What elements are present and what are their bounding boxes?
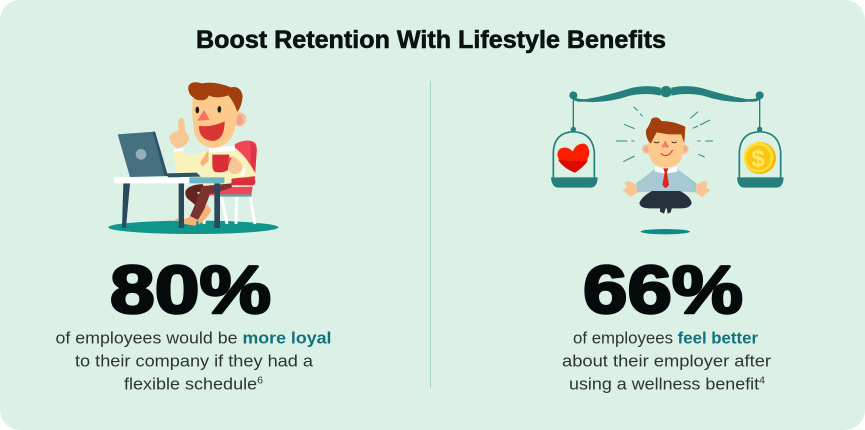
smile: [661, 150, 673, 156]
coffee mug and hand: [212, 155, 246, 177]
hair: [646, 117, 685, 144]
hair: [188, 82, 243, 112]
left description: of employees would be more loyal: [56, 328, 331, 348]
title: Boost Retention With Lifestyle Benefits: [196, 26, 666, 54]
man: [622, 117, 710, 214]
desk: [114, 177, 224, 228]
left description: to their company if they had a: [75, 352, 314, 370]
coin: [744, 142, 776, 174]
right description: of employees feel better: [573, 328, 758, 348]
right scale pan with coin: $: [751, 145, 765, 172]
stat: 80%: 80%: [110, 252, 271, 328]
left description: flexible schedule: [124, 374, 250, 394]
shirt: [174, 146, 257, 186]
floating shadow: [641, 229, 690, 234]
scale beam: [569, 86, 764, 102]
left description: 6: [257, 376, 263, 386]
left description: [56, 328, 331, 394]
ground shadow: [108, 221, 278, 234]
head: [642, 144, 651, 154]
right description: 4: [759, 376, 765, 386]
arms: [636, 169, 655, 192]
torso: [652, 168, 680, 192]
right description: about their employer after: [562, 352, 771, 370]
mouth: [199, 121, 225, 141]
laptop: [118, 132, 201, 177]
hands: [622, 181, 637, 197]
illustration: man at laptop: [108, 82, 278, 234]
illustration: meditating man with balance scale: [551, 86, 784, 234]
pointing hand: [169, 118, 189, 148]
tie: [662, 168, 669, 188]
heart: [557, 144, 589, 173]
chair: [204, 141, 257, 224]
right description: [562, 328, 771, 394]
legs and feet: [175, 181, 232, 226]
closed eyes: [654, 142, 677, 143]
stat: 66%: 66%: [583, 252, 743, 328]
radiating lines: [616, 107, 713, 162]
left scale pan with heart: [551, 97, 598, 188]
crossed legs: [639, 191, 692, 208]
right description: using a wellness benefit: [569, 374, 750, 394]
head: [188, 82, 246, 148]
right scale pan with coin: [737, 97, 784, 188]
